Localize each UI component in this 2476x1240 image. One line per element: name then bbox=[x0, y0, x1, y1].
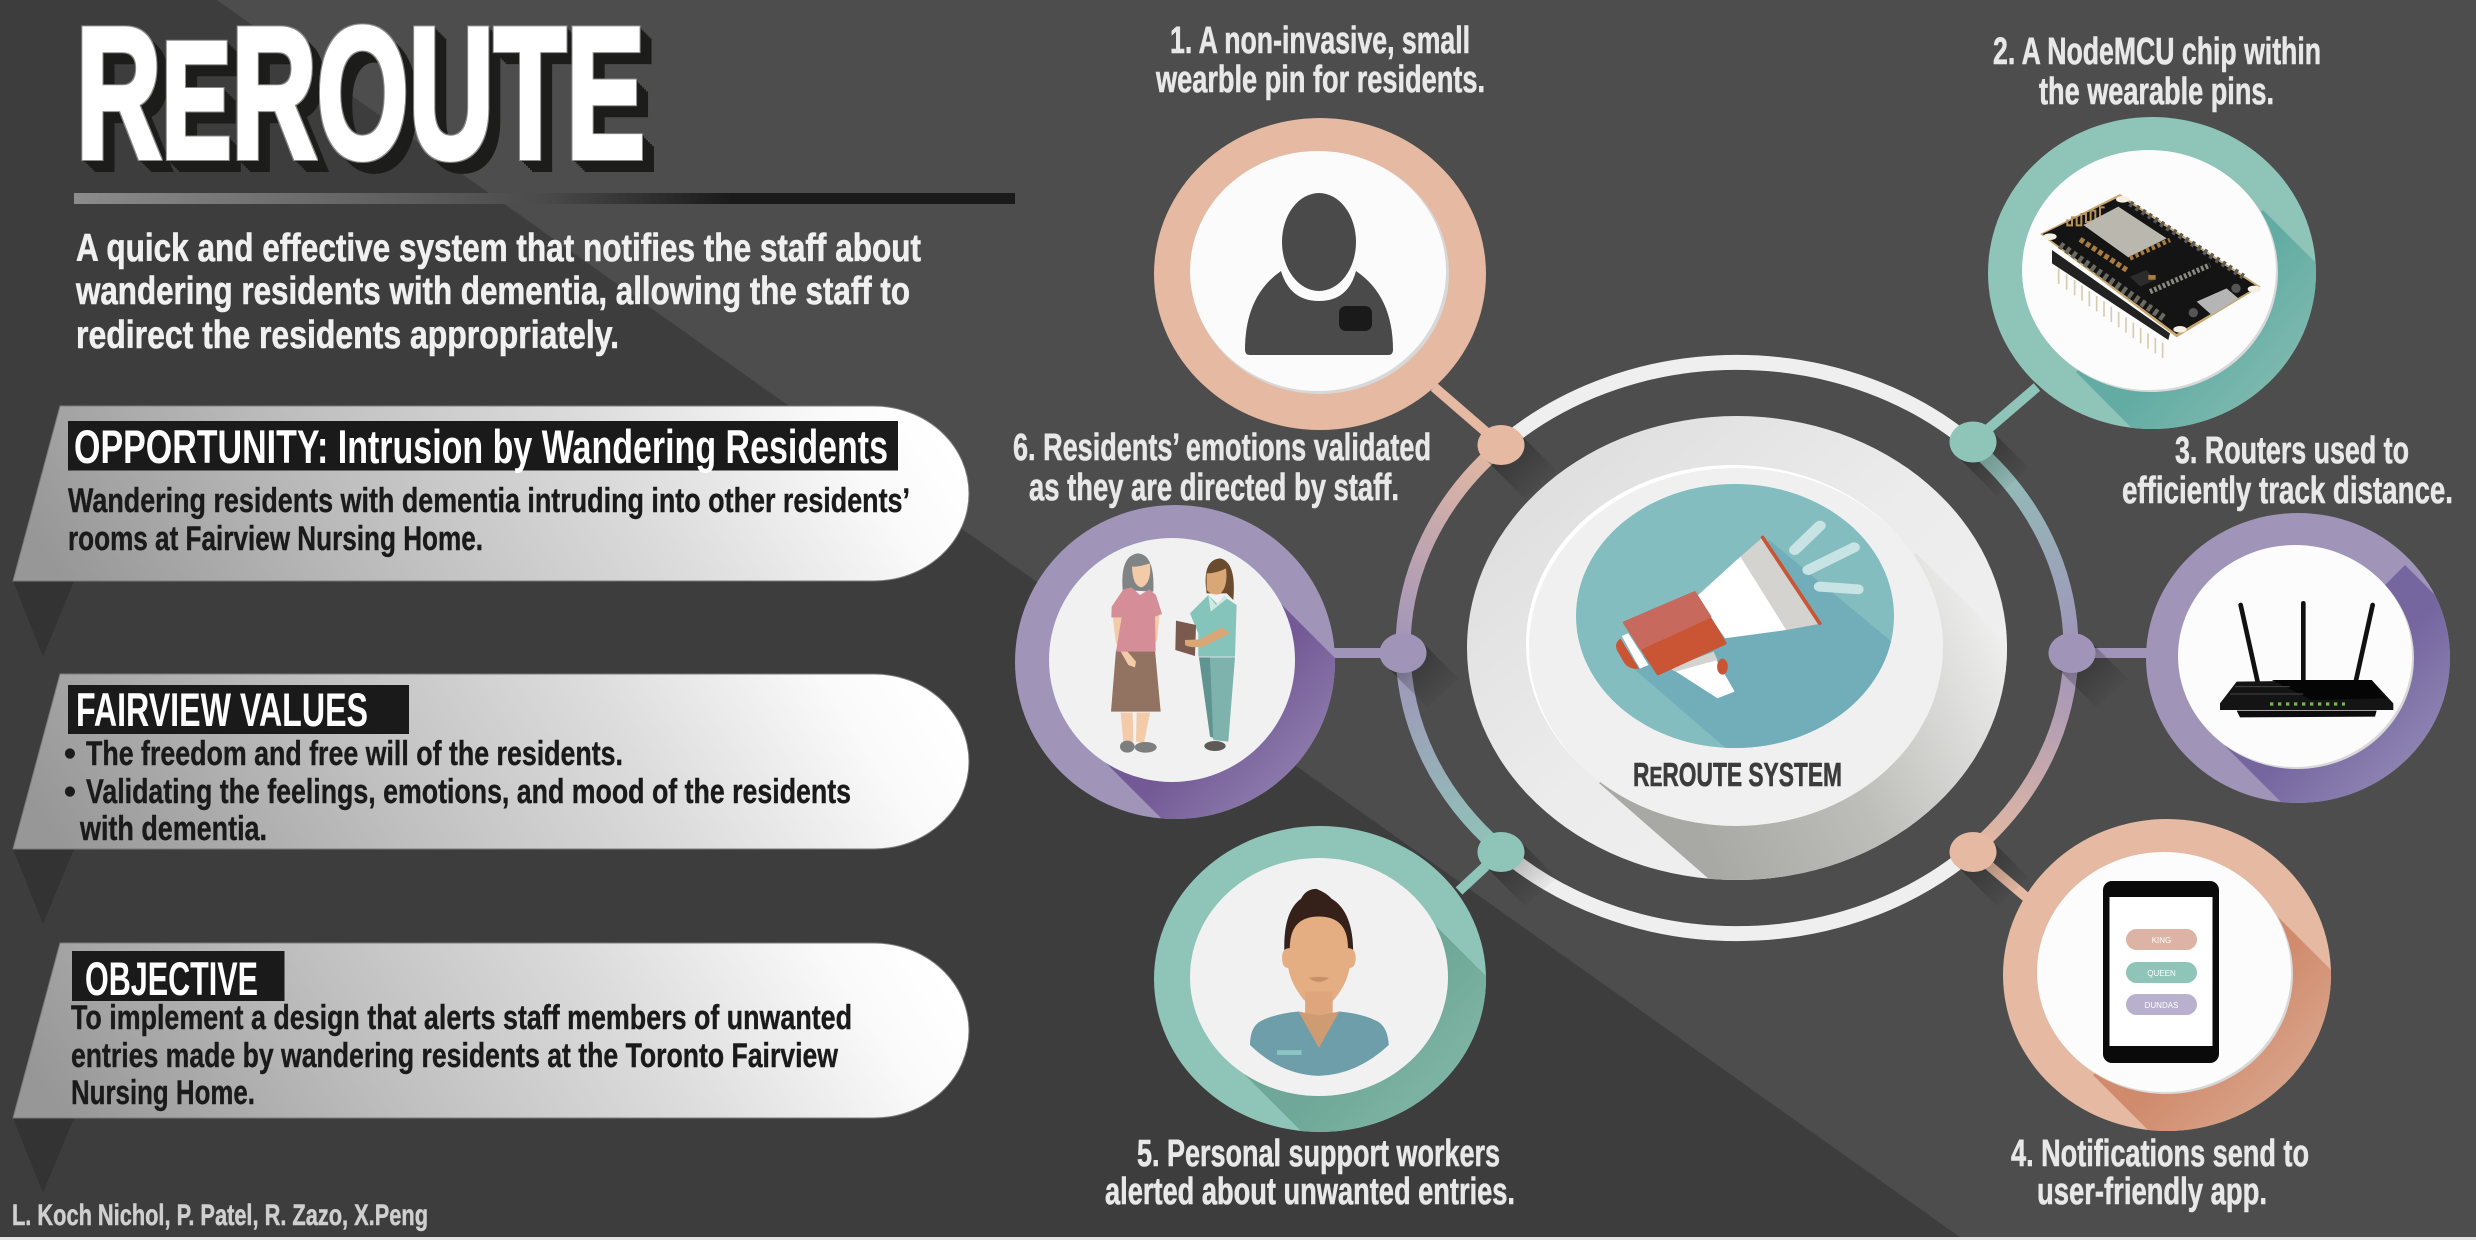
caption 6 bbox=[1013, 427, 1431, 509]
inner disc bbox=[1190, 858, 1448, 1096]
intro text: redirect the residents appropriately. bbox=[76, 314, 619, 357]
ring bbox=[1988, 117, 2316, 429]
body text: Nursing Home. bbox=[71, 1074, 255, 1112]
inner lip bbox=[2039, 854, 2293, 1094]
disc long shadow bbox=[1599, 554, 2007, 880]
caption 1 bbox=[1155, 20, 1485, 101]
ring bbox=[1015, 505, 1335, 819]
caption 6: as they are directed by staff. bbox=[1029, 467, 1399, 509]
icon: tablet: KING bbox=[2152, 936, 2171, 945]
intro text: A quick and effective system that notifies the staff about bbox=[76, 227, 921, 270]
panel shape bbox=[13, 943, 969, 1118]
background: dark diagonal bbox=[0, 0, 1964, 1240]
body text bbox=[68, 482, 910, 558]
caption 2: the wearable pins. bbox=[2039, 71, 2274, 113]
icon: tablet bbox=[2103, 881, 2219, 1063]
node shadows bbox=[1387, 428, 2128, 906]
intro text: wandering residents with dementia, allowing the staff to bbox=[75, 270, 910, 313]
circle 6: resident and staff bbox=[1015, 505, 1335, 819]
ring bbox=[1154, 826, 1486, 1132]
nodes bbox=[1380, 422, 2096, 872]
icon: two figures bbox=[1111, 553, 1237, 753]
figure: resident bbox=[1111, 553, 1162, 753]
caption 2: 2. A NodeMCU chip within bbox=[1993, 31, 2321, 73]
long shadow bbox=[2093, 916, 2331, 1131]
badge long shadow bbox=[1634, 540, 1891, 748]
caption 6: 6. Residents’ emotions validated bbox=[1013, 427, 1431, 469]
inner disc bbox=[1529, 468, 1943, 826]
panel pointer bbox=[13, 1118, 74, 1193]
caption 1: 1. A non-invasive, small bbox=[1170, 20, 1470, 62]
icon: tablet: QUEEN bbox=[2147, 969, 2176, 978]
body text bbox=[71, 999, 852, 1112]
panel: objective bbox=[13, 943, 969, 1193]
panel shape bbox=[13, 406, 969, 581]
body text: To implement a design that alerts staff members of unwanted bbox=[71, 999, 852, 1037]
icon: megaphone bbox=[1616, 526, 1858, 698]
icon: person with pin bbox=[1245, 193, 1393, 355]
bullet list: • bbox=[64, 735, 76, 773]
authors: L. Koch Nichol, P. Patel, R. Zazo, X.Peng bbox=[12, 1199, 428, 1232]
ring bbox=[1403, 362, 2071, 934]
inner disc rim bbox=[1526, 465, 1940, 823]
bottom edge line bbox=[0, 1237, 2476, 1240]
circle 4: tablet app bbox=[2003, 819, 2331, 1131]
circle 3: router bbox=[2146, 513, 2450, 803]
bullet list: with dementia. bbox=[79, 810, 267, 848]
icon: router bbox=[2220, 603, 2393, 717]
icon: chip board bbox=[2040, 194, 2261, 358]
bullet list bbox=[64, 735, 851, 848]
connectors bbox=[1330, 387, 2150, 897]
caption 5: 5. Personal support workers bbox=[1137, 1133, 1500, 1175]
system label: REROUTE SYSTEM bbox=[1633, 756, 1842, 793]
long shadow bbox=[1106, 604, 1335, 819]
figure: staff bbox=[1175, 558, 1237, 751]
sound waves bbox=[1795, 526, 1858, 589]
icon: tablet: DUNDAS bbox=[2145, 1001, 2178, 1010]
caption 4: 4. Notifications send to bbox=[2011, 1133, 2309, 1175]
panel: opportunity bbox=[13, 406, 969, 657]
caption 2 bbox=[1993, 31, 2321, 113]
heading box: OBJECTIVE bbox=[85, 952, 258, 1005]
caption 3 bbox=[2122, 430, 2453, 512]
icon: nurse bbox=[1250, 889, 1389, 1076]
panel shape bbox=[13, 674, 969, 849]
circle 2: nodemcu chip bbox=[1988, 117, 2316, 429]
central disc bbox=[1467, 416, 2007, 880]
inner lip bbox=[2180, 547, 2414, 769]
inner disc bbox=[2022, 150, 2276, 390]
intro text bbox=[75, 227, 921, 357]
long shadow bbox=[1245, 925, 1486, 1132]
caption 4: user-friendly app. bbox=[2037, 1171, 2267, 1213]
heading box: OPPORTUNITY: Intrusion by Wandering Residents bbox=[74, 420, 888, 473]
long shadow bbox=[2076, 210, 2316, 429]
inner disc bbox=[2037, 852, 2291, 1092]
body text: Wandering residents with dementia intruding into other residents’ bbox=[68, 482, 910, 520]
title rule bbox=[74, 193, 1015, 204]
circle 1: wearable pin bbox=[1154, 118, 1486, 430]
bullet list: • bbox=[64, 773, 76, 811]
teal badge bbox=[1576, 484, 1894, 748]
body text: entries made by wandering residents at the Toronto Fairview bbox=[71, 1037, 838, 1075]
long shadow bbox=[2225, 565, 2450, 803]
panel pointer bbox=[13, 581, 74, 657]
caption 5: alerted about unwanted entries. bbox=[1105, 1171, 1515, 1213]
ring bbox=[2146, 513, 2450, 803]
caption 5 bbox=[1105, 1133, 1515, 1213]
inner disc bbox=[1190, 151, 1446, 391]
caption 1: wearble pin for residents. bbox=[1155, 59, 1485, 101]
panel: fairview values bbox=[13, 674, 969, 924]
panel pointer bbox=[13, 849, 74, 924]
outer disc bbox=[1467, 416, 2007, 880]
bullet list: The freedom and free will of the residents. bbox=[86, 735, 623, 773]
inner disc bbox=[1049, 538, 1295, 782]
inner lip bbox=[2024, 152, 2278, 392]
body text: rooms at Fairview Nursing Home. bbox=[68, 520, 483, 558]
bullet list: Validating the feelings, emotions, and mood of the residents bbox=[86, 773, 851, 811]
inner lip bbox=[1191, 152, 1449, 394]
ring bbox=[1154, 118, 1486, 430]
inner disc bbox=[2178, 545, 2412, 767]
circle 5: personal support worker bbox=[1154, 826, 1486, 1132]
heading box: FAIRVIEW VALUES bbox=[76, 683, 368, 736]
ring bbox=[2003, 819, 2331, 1131]
caption 4 bbox=[2011, 1133, 2309, 1213]
